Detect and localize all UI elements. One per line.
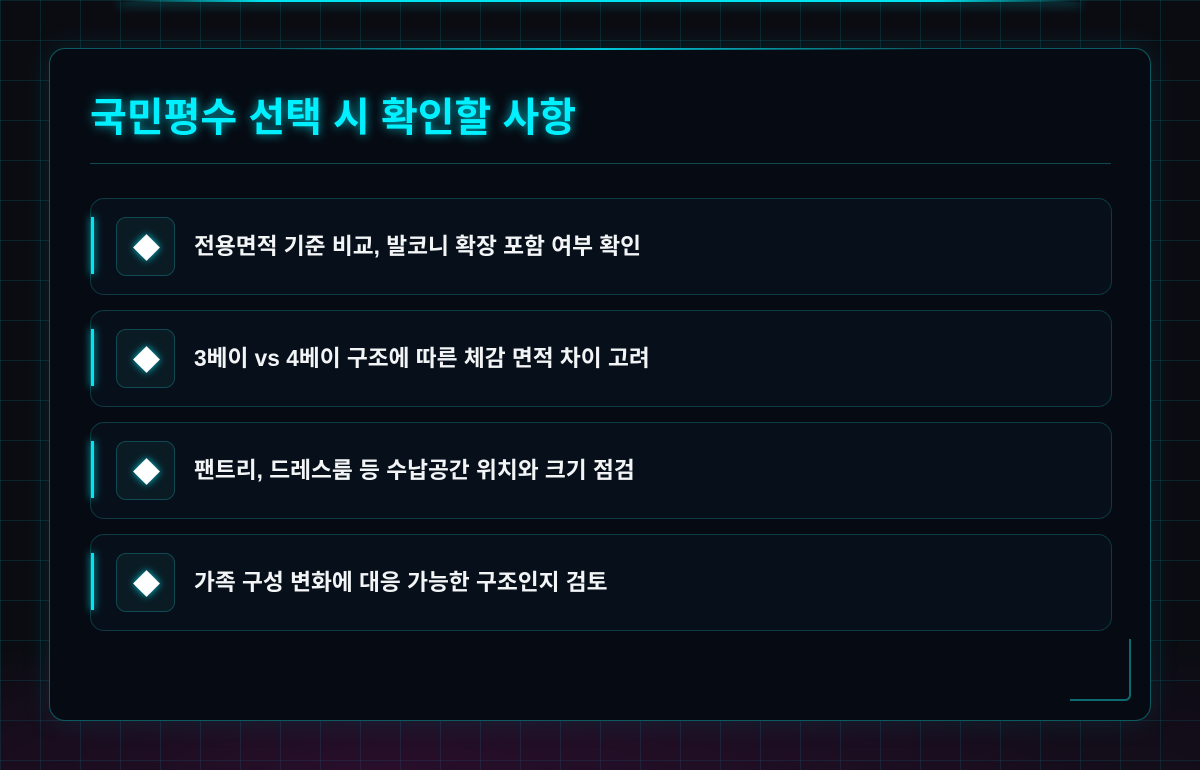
item 4	[90, 534, 1112, 631]
item 1	[90, 198, 1112, 295]
text: 가족 구성 변화에 대응 가능한 구조인지 검토	[194, 569, 608, 595]
item 2	[90, 310, 1112, 407]
text: 전용면적 기준 비교, 발코니 확장 포함 여부 확인	[194, 233, 641, 259]
icon: diamond	[116, 553, 175, 612]
icon: diamond	[116, 329, 175, 388]
icon: diamond	[116, 441, 175, 500]
item 3	[90, 422, 1112, 519]
icon: diamond	[116, 217, 175, 276]
title: 국민평수 선택 시 확인할 사항	[90, 96, 576, 140]
text: 팬트리, 드레스룸 등 수납공간 위치와 크기 점검	[194, 457, 635, 483]
text: 3베이 vs 4베이 구조에 따른 체감 면적 차이 고려	[194, 345, 650, 371]
